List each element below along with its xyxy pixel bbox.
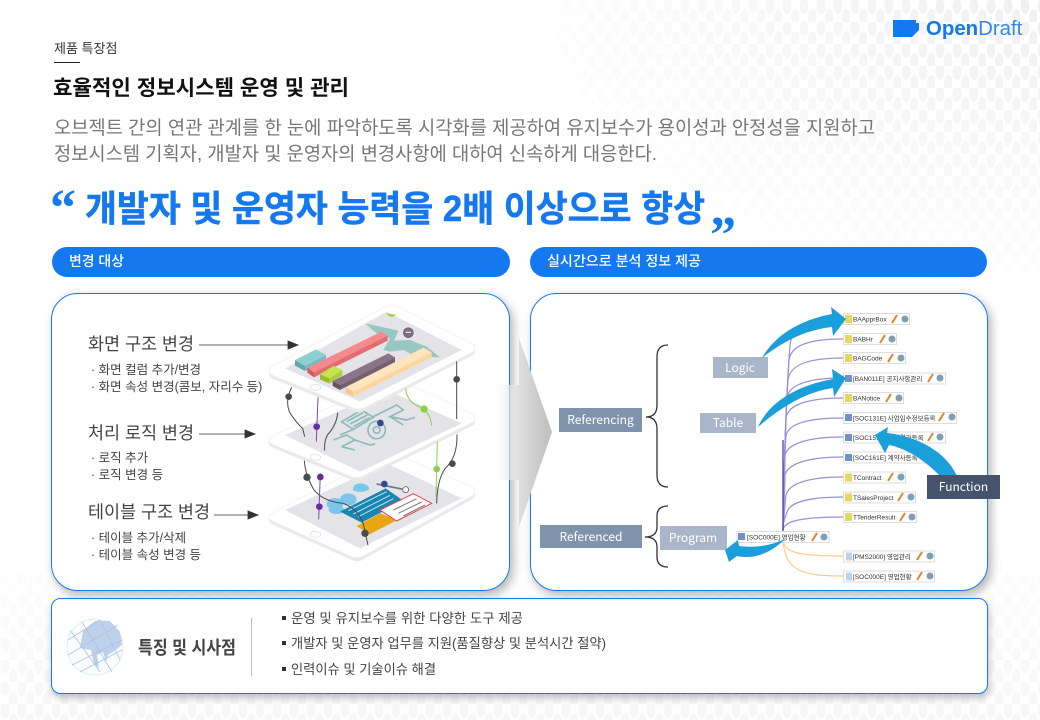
title: 효율적인 정보시스템 운영 및 관리 [53, 77, 349, 100]
headline quote: 개발자 및 운영자 능력을 2배 이상으로 향상 [85, 188, 705, 229]
arrow: Function to SOC151E [875, 427, 957, 476]
section label [54, 41, 117, 63]
change item: logic: · 로직 변경 등 [91, 468, 163, 482]
arrow: Logic to BAApprBox [762, 307, 846, 358]
panel: realtime analysis [530, 294, 988, 590]
node: BAApprBox: BAApprBox [853, 316, 887, 324]
arrow: table [214, 511, 258, 519]
node: TSalesProject [844, 492, 916, 503]
node: TSalesProject: TSalesProject [853, 495, 894, 502]
connectors between layers [288, 361, 457, 545]
node: BABHr [844, 334, 896, 344]
node: SOC131E [844, 412, 956, 424]
description text: 정보시스템 기획자, 개발자 및 운영자의 변경사항에 대하여 신속하게 대응한다. [54, 143, 657, 165]
label: Function [927, 475, 1000, 499]
label: Logic: Logic [725, 359, 755, 376]
change item: table: · 테이블 속성 변경 등 [91, 548, 201, 562]
node: BAGCode [844, 352, 906, 364]
illustration: layered tablets [269, 305, 475, 561]
change item: screen structure: · 화면 속성 변경(콤보, 자리수 등) [91, 380, 262, 394]
node: BAGCode: BAGCode [853, 356, 883, 362]
feature list: 운영 및 유지보수를 위한 다양한 도구 제공 [291, 611, 523, 626]
label: Program: Program [669, 529, 717, 546]
node: BAApprBox [844, 314, 910, 324]
icon: globe [67, 619, 123, 675]
label: Referencing [559, 408, 642, 432]
node: PMS2000 [844, 551, 934, 562]
headline quote [50, 180, 736, 264]
change item: screen structure: 화면 구조 변경 [88, 334, 194, 354]
feature list [282, 611, 606, 677]
arrow: screen structure [199, 341, 298, 349]
tablet: top screen layer [269, 305, 475, 412]
node: SOC161E [844, 452, 940, 463]
node: TContract [844, 472, 906, 483]
node: SOC000E centre: [SOC000E] 영업현황 [747, 532, 806, 542]
node: TContract: TContract [853, 475, 882, 482]
pill heading: 변경 대상: 변경 대상 [69, 251, 124, 271]
label: Table [700, 413, 756, 433]
node: BAN011E: [BAN011E] 공지사항관리 [853, 374, 922, 383]
brace: referenced [645, 506, 668, 567]
change item: table [88, 502, 210, 562]
label: Function: Function [939, 478, 988, 495]
headline quote: ” [710, 207, 736, 264]
description text: 오브젝트 간의 연관 관계를 한 눈에 파악하도록 시각화를 제공하여 유지보수가 용이성과 안정성을 지원하고 [54, 117, 875, 139]
node: SOC151E: [SOC151E] 입찰결과등록 [853, 433, 924, 442]
label: Referenced [540, 525, 642, 548]
node: PMS2000: [PMS2000] 영업관리 [853, 552, 911, 561]
node: SOC161E: [SOC161E] 계약사등록 [853, 453, 918, 462]
feature list: 개발자 및 운영자 업무를 지원(품질향상 및 분석시간 절약) [291, 636, 606, 651]
description text [54, 117, 875, 165]
section label: 제품 특장점 [54, 41, 117, 56]
headline quote: “ [50, 180, 76, 237]
arrow: logic [199, 430, 255, 438]
brace: referencing [646, 345, 668, 487]
change item: screen structure [88, 334, 262, 394]
pill heading: 실시간으로 분석 정보 제공 [530, 247, 987, 277]
label: Program [660, 526, 727, 550]
arrow: SOC000E to Program [725, 539, 785, 562]
label: Table: Table [713, 414, 744, 431]
node: BANotice: BANotice [853, 396, 880, 402]
tablet: bottom table layer [269, 454, 475, 561]
panel: change targets [52, 294, 510, 590]
change item: logic: · 로직 추가 [91, 451, 149, 465]
node: TTenderResult [844, 512, 916, 522]
change item: table: 테이블 구조 변경 [88, 502, 210, 522]
feature list: 인력이슈 및 기술이슈 해결 [291, 662, 436, 677]
node: SOC000E lower: [SOC000E] 영업현황 [853, 572, 912, 581]
node: TTenderResult: TTenderResult [853, 514, 895, 522]
tree nodes [737, 314, 956, 582]
label: Logic [713, 357, 768, 378]
arrow: large gray between panels [490, 338, 552, 527]
change item: logic [88, 423, 194, 482]
heading: 특징 및 시사점: 특징 및 시사점 [138, 638, 236, 658]
tablet: middle logic layer [269, 378, 475, 481]
arrow: Table to BAN011E [758, 369, 846, 427]
node: SOC000E lower [844, 571, 934, 582]
logo: OpenDraft: OpenDraft [926, 18, 1023, 40]
node: BABHr: BABHr [853, 336, 874, 344]
connector nodes [285, 376, 460, 537]
pill heading: 실시간으로 분석 정보 제공: 실시간으로 분석 정보 제공 [547, 251, 701, 271]
change item: table: · 테이블 추가/삭제 [91, 531, 186, 545]
dependency tree lines [783, 319, 843, 576]
panel: features and implications [52, 598, 988, 694]
label: Referenced: Referenced [560, 528, 622, 545]
label: Referencing: Referencing [567, 411, 634, 428]
pill heading: 변경 대상 [52, 247, 510, 277]
node: SOC131E: [SOC131E] 사업입수정보등록 [853, 414, 936, 422]
change item: screen structure: · 화면 컬럼 추가/변경 [91, 363, 201, 377]
node: BANotice [844, 392, 904, 404]
node: SOC151E [844, 432, 946, 443]
change item: logic: 처리 로직 변경 [88, 423, 194, 443]
node: BAN011E [844, 373, 946, 384]
node: SOC000E centre [737, 532, 829, 542]
